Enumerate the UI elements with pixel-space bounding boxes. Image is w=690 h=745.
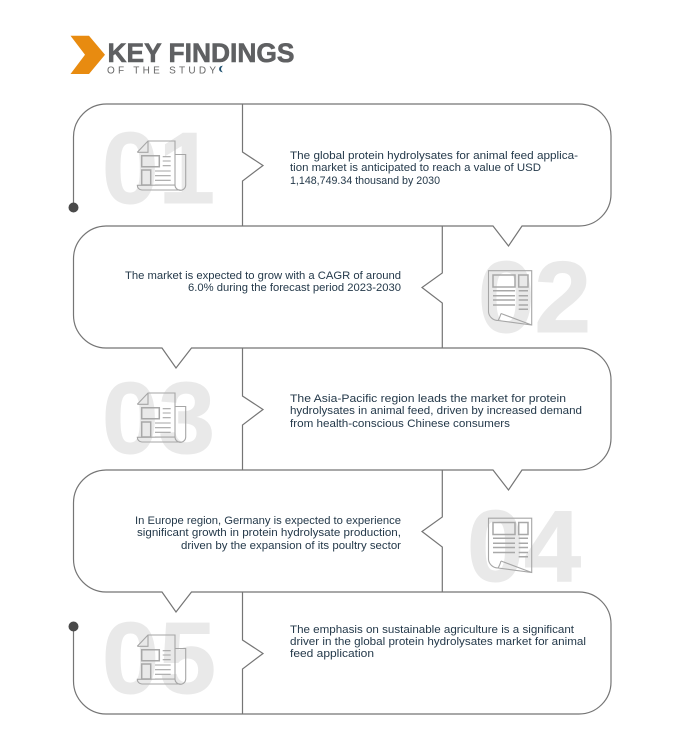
text: finding 5: feed application	[290, 648, 374, 660]
serpentine timeline outline	[73, 104, 611, 714]
timeline dot: end	[68, 622, 78, 632]
panel numbers and icons	[102, 113, 591, 715]
text: finding 1: tion market is anticipated to reach a value of USD	[290, 162, 541, 174]
text: finding 2	[125, 270, 401, 294]
icon: newspaper 05	[137, 635, 186, 684]
text: finding 4: significant growth in protein hydrolysate production,	[137, 527, 401, 539]
icon: newspaper 04	[488, 518, 532, 572]
number 05: 05	[102, 603, 216, 715]
number 03: 03	[102, 363, 215, 475]
text: finding 1	[290, 150, 578, 187]
text: finding 5	[290, 624, 586, 660]
text: finding 2: 6.0% during the forecast period 2023-2030	[188, 282, 401, 294]
number 04: 04	[467, 491, 581, 603]
title block	[70, 36, 294, 76]
icon: newspaper 03	[137, 393, 186, 442]
number 01: 01	[102, 113, 215, 225]
number 02: 02	[478, 242, 591, 354]
dividers with pointers	[242, 104, 442, 714]
icon: newspaper 01	[137, 141, 186, 190]
text: finding 4: driven by the expansion of its poultry sector	[181, 540, 401, 552]
title: key findings: KEY FINDINGS	[108, 38, 294, 68]
text: finding 3: The Asia-Pacific region leads the market for protein	[290, 393, 566, 405]
text: finding 4: In Europe region, Germany is expected to experience	[135, 515, 401, 527]
text: finding 2: The market is expected to grow with a CAGR of around	[125, 270, 401, 282]
text: finding 4	[135, 515, 401, 552]
text: finding 5: driver in the global protein hydrolysates market for animal	[290, 636, 586, 648]
text: finding 5: The emphasis on sustainable agriculture is a significant	[290, 624, 575, 636]
icon: small dot	[220, 66, 222, 72]
icon: newspaper 02	[488, 271, 532, 325]
timeline dot: start	[68, 202, 78, 212]
text: finding 1: 1,148,749.34 thousand by 2030	[290, 175, 440, 187]
text: finding 3	[290, 393, 582, 430]
icon: orange chevron	[70, 36, 105, 74]
subtitle: of the study: OF THE STUDY	[107, 66, 216, 76]
text: finding 3: hydrolysates in animal feed, driven by increased demand	[290, 405, 582, 417]
text: finding 1: The global protein hydrolysates for animal feed applica-	[290, 150, 578, 162]
text: finding 3: from health-conscious Chinese consumers	[290, 418, 510, 430]
